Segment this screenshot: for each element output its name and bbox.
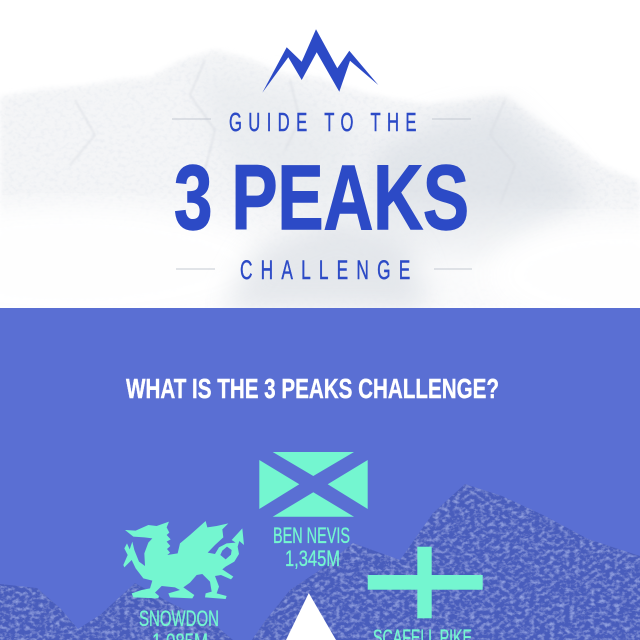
label: snowdon: SNOWDON [139, 606, 219, 631]
title: challenge: CHALLENGE [240, 254, 410, 285]
blue mountain range [0, 484, 640, 640]
label: ben nevis: 1,345M [285, 546, 340, 571]
icon: scottish flag [259, 452, 368, 517]
title: 3 peaks: 3 PEAKS [174, 147, 469, 249]
icon: mountain logo [262, 29, 378, 93]
label: snowdon [139, 606, 219, 640]
panel: what is the challenge [0, 308, 640, 640]
heading: WHAT IS THE 3 PEAKS CHALLENGE? [126, 373, 499, 404]
title: guide to the: GUIDE TO THE [229, 107, 417, 137]
white peak triangle [286, 593, 336, 640]
label: ben nevis: BEN NEVIS [273, 523, 350, 548]
icon: welsh dragon [123, 521, 244, 599]
label: ben nevis [273, 523, 350, 571]
header background: snowy mountain [0, 0, 640, 330]
icon: english cross [368, 547, 483, 618]
